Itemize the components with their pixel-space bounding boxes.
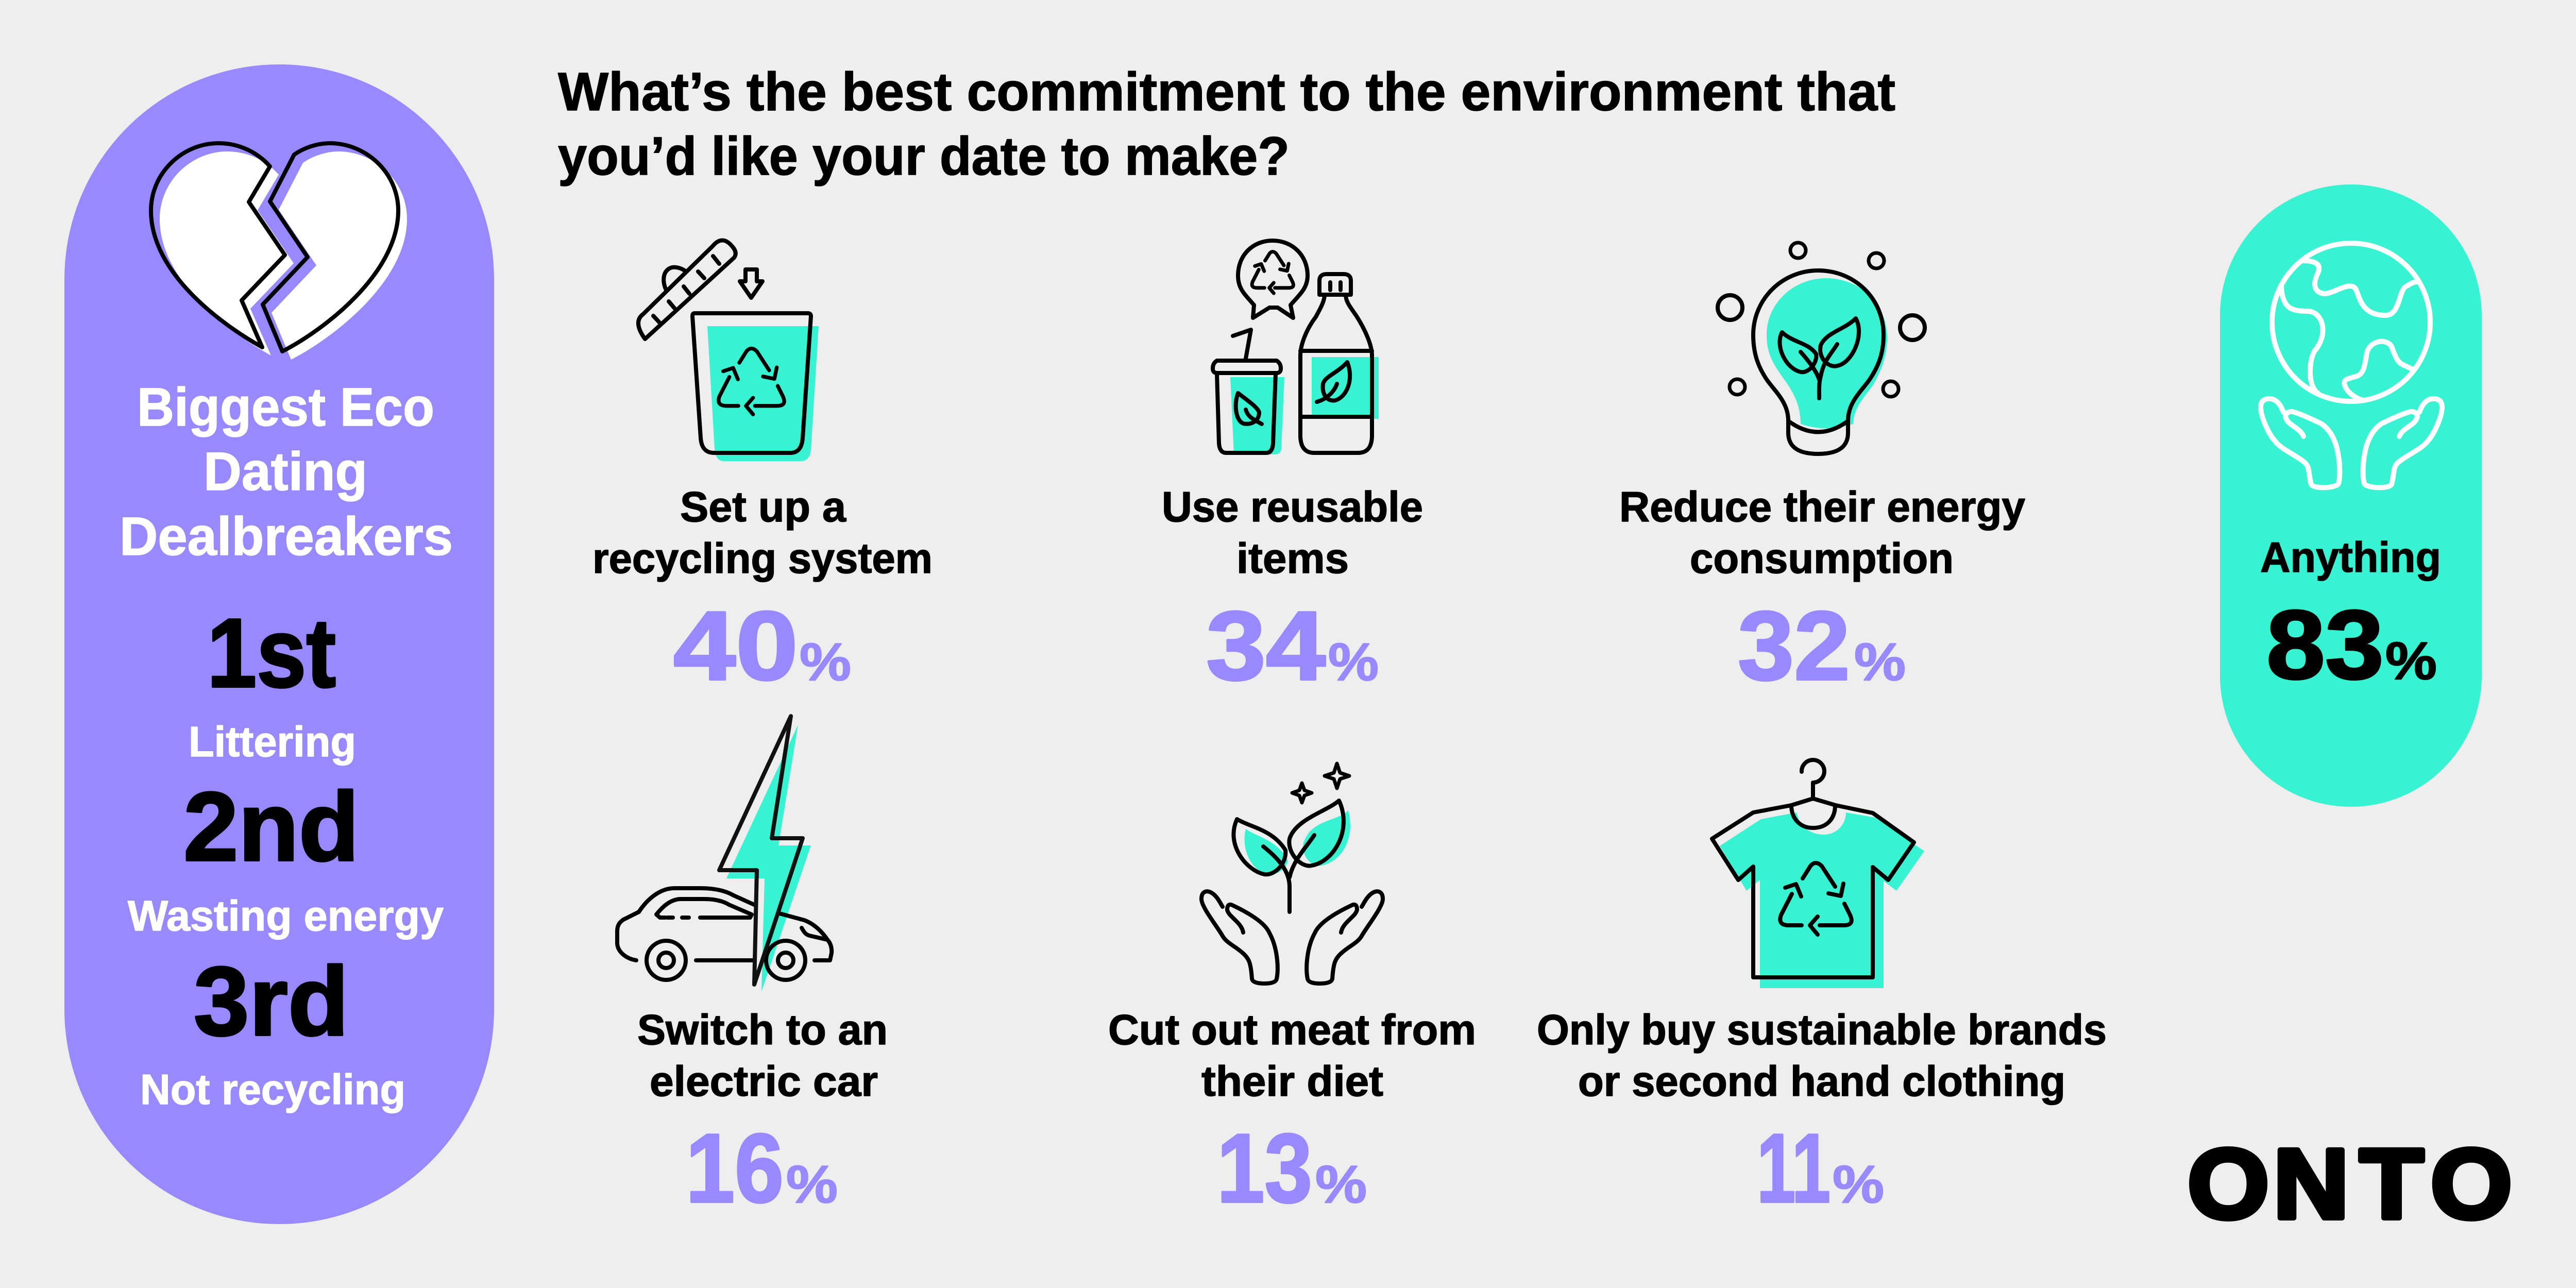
label: Switch to an: [637, 1006, 888, 1054]
icon: light bulb with leaves: [1718, 243, 1925, 454]
panel: biggest eco dating dealbreakers: [64, 64, 494, 1224]
heading: panel title: Dealbreakers: [120, 506, 453, 567]
value: 34%: 34: [1206, 591, 1326, 701]
value: 34%: [1206, 591, 1379, 701]
heading: panel title: Biggest Eco: [137, 377, 434, 437]
value: 13%: %: [1315, 1155, 1367, 1214]
ranking: 2nd wasting energy: 2nd: [183, 772, 359, 882]
item: electric car: [617, 716, 888, 1223]
label: Cut out meat from: [1108, 1006, 1476, 1054]
label: Anything: [2260, 533, 2441, 581]
icon: car and lightning bolt: [617, 716, 832, 992]
label: [1162, 483, 1423, 582]
logo: ONTO: ONTO: [2188, 1128, 2512, 1239]
ranking: 1st littering: 1st: [207, 599, 336, 708]
panel: anything 83%: [2220, 184, 2482, 807]
value: 83%: %: [2385, 631, 2437, 690]
label: electric car: [650, 1057, 878, 1105]
icon: cup, bottle and recycling bubble: [1213, 241, 1379, 454]
ranking: 1st littering: Littering: [189, 718, 356, 766]
title: survey question: you’d like your date to make?: [558, 126, 1290, 187]
heading: panel title: Dating: [204, 442, 367, 502]
label: consumption: [1690, 534, 1954, 582]
value: 83%: [2266, 590, 2437, 700]
ranking: 3rd not recycling: Not recycling: [140, 1065, 405, 1113]
icon: globe in hands: [2261, 243, 2442, 487]
value: 13%: 13: [1217, 1114, 1312, 1223]
ranking: 3rd not recycling: 3rd: [194, 947, 349, 1056]
value: 32%: [1738, 591, 1906, 701]
ranking: 1st littering: [189, 599, 356, 766]
label: items: [1236, 534, 1349, 582]
ranking: 3rd not recycling: [140, 947, 405, 1113]
icon: plant in hands: [1201, 764, 1383, 984]
label: [592, 483, 933, 582]
value: 16%: %: [786, 1155, 838, 1214]
label: Use reusable: [1162, 483, 1423, 531]
value: 40%: %: [800, 632, 851, 691]
value: 16%: 16: [686, 1114, 784, 1223]
value: 11%: %: [1833, 1155, 1884, 1214]
item: reusable items: [1162, 241, 1423, 701]
value: 32%: 32: [1738, 591, 1850, 701]
value: 40%: [673, 591, 851, 701]
title: survey question: [558, 62, 1895, 187]
value: 40%: 40: [673, 591, 798, 701]
icon: recycling bin: [638, 240, 819, 461]
ranking: 2nd wasting energy: [128, 772, 444, 940]
value: 34%: %: [1328, 632, 1379, 691]
value: 11%: 11: [1757, 1114, 1831, 1223]
item: recycling system: [592, 240, 933, 701]
icon: broken heart: [151, 143, 407, 360]
label: recycling system: [592, 534, 933, 582]
icon: t-shirt on hanger: [1712, 760, 1924, 988]
label: [1108, 1006, 1476, 1105]
label: Only buy sustainable brands: [1537, 1006, 2107, 1054]
value: 32%: %: [1854, 632, 1906, 691]
label: [1537, 1006, 2107, 1105]
title: survey question: What’s the best commitment to the environment that: [558, 62, 1895, 122]
label: Reduce their energy: [1619, 483, 2025, 531]
value: 83%: 83: [2266, 590, 2384, 700]
label: [1619, 483, 2025, 582]
label: Set up a: [680, 483, 846, 531]
item: reduce energy consumption: [1619, 243, 2025, 701]
item: sustainable clothing: [1537, 760, 2107, 1223]
label: their diet: [1201, 1057, 1383, 1105]
item: cut out meat: [1108, 764, 1476, 1223]
label: [637, 1006, 888, 1105]
label: or second hand clothing: [1578, 1057, 2065, 1105]
heading: panel title: [120, 377, 453, 567]
ranking: 2nd wasting energy: Wasting energy: [128, 892, 444, 940]
